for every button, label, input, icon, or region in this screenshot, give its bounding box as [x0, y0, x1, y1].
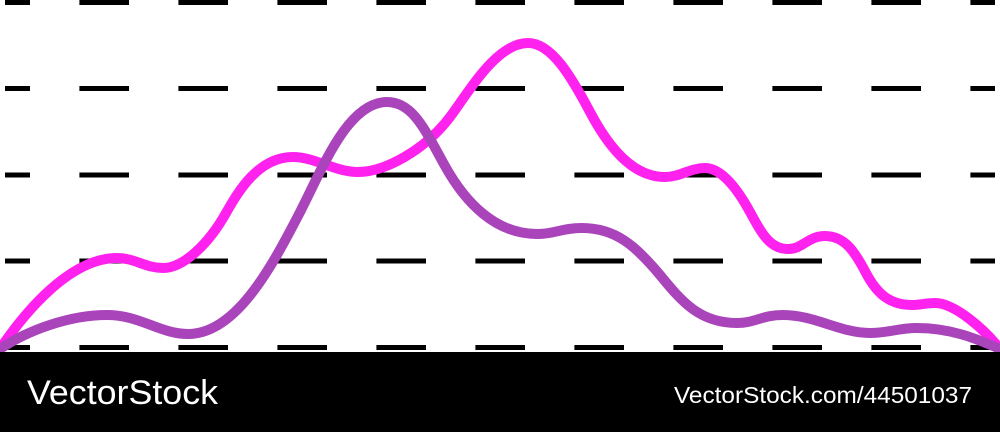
purple data line — [0, 102, 1000, 349]
footer brand name: VectorStock — [27, 374, 219, 412]
footer image id: VectorStock.com/44501037 — [674, 382, 972, 408]
dashed horizontal grid lines — [5, 2, 995, 348]
magenta data line — [0, 43, 1000, 349]
footer bar — [0, 352, 1000, 432]
